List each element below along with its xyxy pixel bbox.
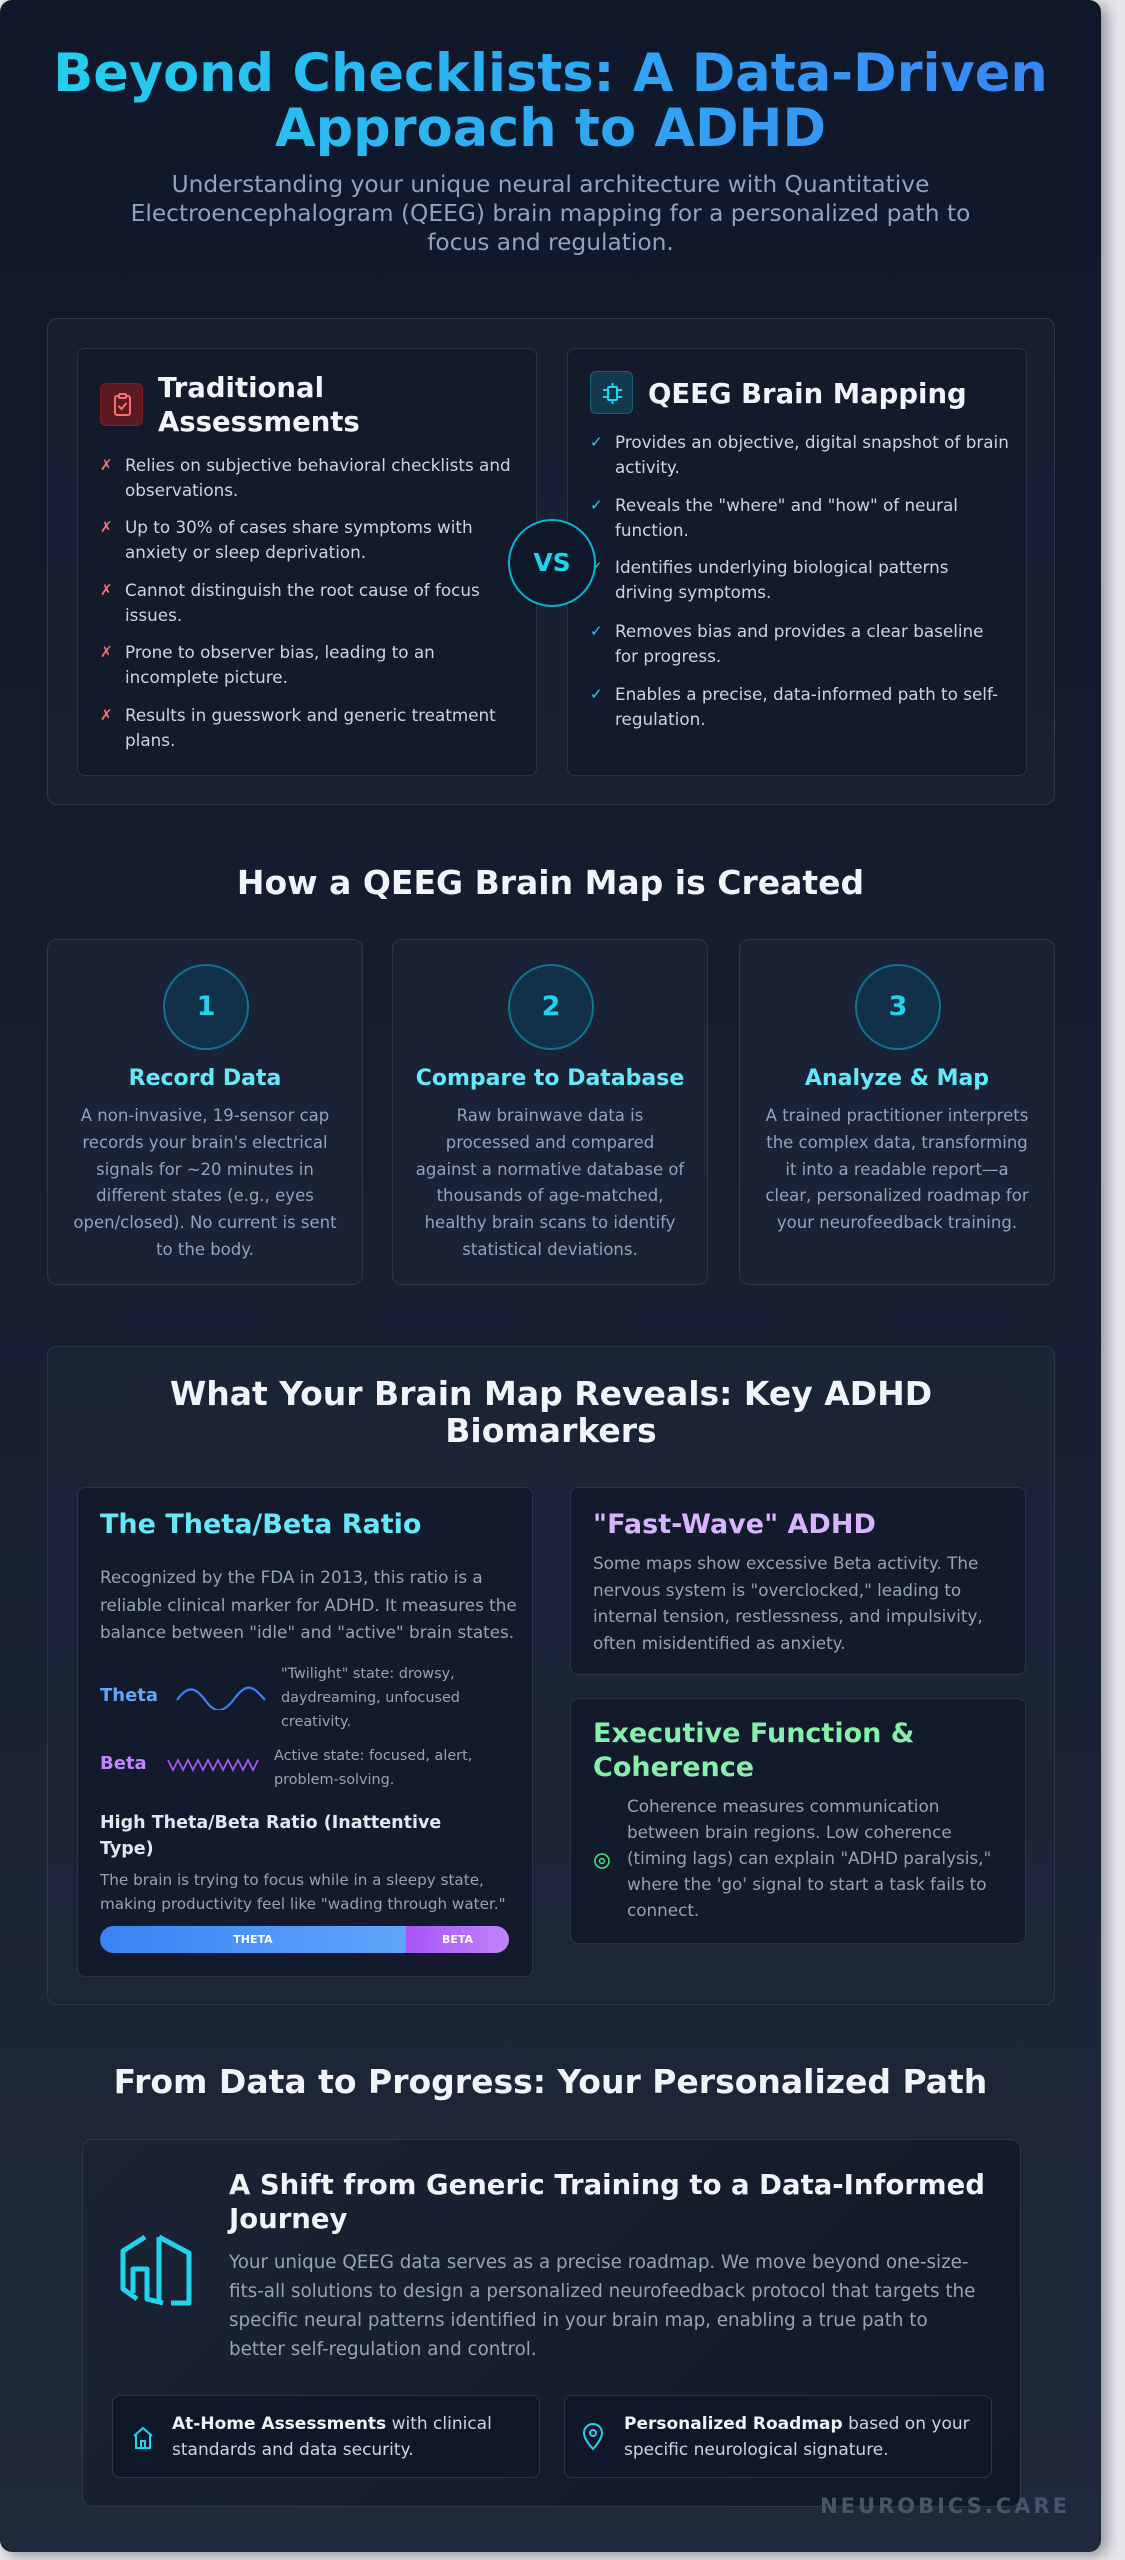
- title: Beyond Checklists: A Data-Driven: [53, 43, 1048, 104]
- bar: theta vs beta: THETA: [233, 1933, 273, 1946]
- heading: biomarkers: [170, 1374, 932, 1450]
- step 2: 2: [542, 991, 560, 1022]
- step 1: 1: [197, 991, 215, 1022]
- theta row: [100, 1666, 460, 1730]
- card: fast-wave ADHD: Some maps show excessive Beta activity. The nervous system is "overclocked," leading to internal tension, restlessness, and impulsivity, often misidentified as anxiety.: [593, 1553, 983, 1652]
- feature: personalized roadmap: Personalized Roadmap based on your specific neurological signature.: [624, 2414, 970, 2460]
- card: QEEG brain mapping: Reveals the "where" and "how" of neural function.: [615, 495, 958, 540]
- icon: target: [594, 1853, 610, 1869]
- footer: brand: NEUROBICS.CARE: [820, 2494, 1070, 2518]
- list: traditional drawbacks: [100, 455, 511, 750]
- step 3: Analyze & Map: [805, 1066, 989, 1091]
- beta row: Active state: focused, alert, problem-solving.: [274, 1748, 472, 1788]
- card: traditional assessments: ✗: [100, 581, 113, 599]
- heading: how a QEEG brain map is created: How a QEEG Brain Map is Created: [237, 863, 864, 902]
- heading: traditional: Traditional: [158, 372, 324, 404]
- theta row: "Twilight" state: drowsy, daydreaming, unfocused creativity.: [281, 1666, 460, 1730]
- heading: theta/beta: The Theta/Beta Ratio: [100, 1509, 421, 1540]
- feature: personalized roadmap: [564, 2395, 992, 2478]
- feature: at-home assessments: [112, 2395, 540, 2478]
- step 2: Compare to Database: [416, 1066, 684, 1091]
- card: traditional assessments: ✗: [100, 518, 113, 536]
- beta row: Beta: [100, 1753, 147, 1774]
- icon: theta wave: [176, 1686, 266, 1710]
- card: QEEG brain mapping: ✓: [590, 685, 603, 703]
- VS badge: VS: [533, 548, 571, 577]
- subtitle: Understanding your unique neural architecture with Quantitative Electroencephalogram (QEEG) brain mapping for a personalized path to focus and regulation.: [131, 171, 970, 256]
- icon: path: [120, 2234, 192, 2306]
- step 1: A non-invasive, 19-sensor cap records your brain's electrical signals for ~20 minutes in different states (e.g., eyes open/closed). No current is sent to the body.: [73, 1106, 337, 1259]
- icon: beta wave: [167, 1758, 259, 1772]
- step 3: 3: [889, 991, 907, 1022]
- heading: from data to progress: From Data to Progress: Your Personalized Path: [114, 2062, 987, 2101]
- heading: shift: A Shift from Generic Training to a Data-Informed Journey: [229, 2169, 985, 2235]
- card: QEEG brain mapping: Removes bias and provides a clear baseline for progress.: [615, 621, 984, 666]
- feature: at-home assessments: At-Home Assessments with clinical standards and data security.: [172, 2414, 492, 2460]
- step 2: [392, 939, 708, 1285]
- card: QEEG brain mapping: ✓: [590, 622, 603, 640]
- card: theta/beta ratio: [77, 1487, 533, 1977]
- card: traditional assessments: ✗: [100, 643, 113, 661]
- icon: chip: [590, 371, 633, 414]
- heading: traditional: [158, 372, 360, 438]
- card: QEEG brain mapping: [567, 348, 1027, 776]
- title: [0, 46, 1101, 156]
- heading: QEEG: QEEG Brain Mapping: [648, 378, 967, 410]
- text: roadmap description: Your unique QEEG data serves as a precise roadmap. We move beyond one-size-fits-all solutions to design a personalized neurofeedback protocol that targets the specific neural patterns identified in your brain map, enabling a true path to better self-regulation and control.: [229, 2252, 975, 2360]
- icon: clipboard: [100, 383, 143, 426]
- card: QEEG brain mapping: ✓: [590, 496, 603, 514]
- card: fast-wave ADHD: "Fast-Wave" ADHD: [593, 1509, 876, 1540]
- card: traditional assessments: Up to 30% of cases share symptoms with anxiety or sleep deprivation.: [125, 517, 473, 562]
- list: QEEG benefits: [590, 432, 1009, 729]
- card: QEEG brain mapping: Identifies underlying biological patterns driving symptoms.: [615, 557, 949, 602]
- card: traditional assessments: Relies on subjective behavioral checklists and observations.: [125, 455, 511, 500]
- beta row: [100, 1748, 472, 1788]
- card: QEEG brain mapping: ✓: [590, 433, 603, 451]
- step 3: A trained practitioner interprets the complex data, transforming it into a readable report—a clear, personalized roadmap for your neurofeedback training.: [765, 1106, 1029, 1232]
- panel: comparison: [47, 318, 1055, 805]
- panel: biomarkers: [47, 1346, 1055, 2005]
- heading: biomarkers: Biomarkers: [445, 1411, 657, 1450]
- card: traditional assessments: Prone to observer bias, leading to an incomplete picture.: [125, 642, 435, 687]
- heading: biomarkers: What Your Brain Map Reveals: Key ADHD: [170, 1374, 932, 1413]
- bar: theta vs beta: BETA: [442, 1933, 473, 1946]
- heading: traditional: Assessments: [158, 406, 360, 438]
- text: high theta description: The brain is trying to focus while in a sleepy state, making productivity feel like "wading through water.": [100, 1871, 506, 1913]
- card: traditional assessments: Results in guesswork and generic treatment plans.: [125, 705, 496, 750]
- card: traditional assessments: ✗: [100, 456, 113, 474]
- panel: personalized path: [82, 2139, 1021, 2507]
- VS badge: [508, 519, 596, 607]
- subheading: high theta/beta: High Theta/Beta Ratio (Inattentive Type): [100, 1813, 441, 1859]
- step 1: Record Data: [129, 1066, 281, 1091]
- title: Approach to ADHD: [275, 98, 826, 159]
- step 3: [739, 939, 1055, 1285]
- card: fast-wave ADHD: [570, 1487, 1026, 1675]
- step 1: [47, 939, 363, 1285]
- card: traditional assessments: [77, 348, 537, 776]
- bar: theta vs beta: [100, 1926, 509, 1953]
- theta row: Theta: [100, 1685, 158, 1706]
- card: traditional assessments: ✗: [100, 706, 113, 724]
- step 2: Raw brainwave data is processed and compared against a normative database of thousands of age-matched, healthy brain scans to identify statistical deviations.: [416, 1106, 684, 1259]
- card: QEEG brain mapping: Enables a precise, data-informed path to self-regulation.: [615, 684, 998, 729]
- card: executive function & coherence: Coherence measures communication between brain regions. Low coherence (timing lags) can explain "ADHD paralysis," where the 'go' signal to start a task fails to connect.: [627, 1796, 991, 1920]
- card: QEEG brain mapping: Provides an objective, digital snapshot of brain activity.: [615, 432, 1009, 477]
- card: QEEG brain mapping: ✓: [590, 558, 603, 576]
- text: FDA description: Recognized by the FDA in 2013, this ratio is a reliable clinical marker for ADHD. It measures the balance between "idle" and "active" brain states.: [100, 1567, 517, 1642]
- card: traditional assessments: Cannot distinguish the root cause of focus issues.: [125, 580, 480, 625]
- card: executive function & coherence: [570, 1698, 1026, 1944]
- card: executive function & coherence: Executive Function & Coherence: [593, 1718, 914, 1783]
